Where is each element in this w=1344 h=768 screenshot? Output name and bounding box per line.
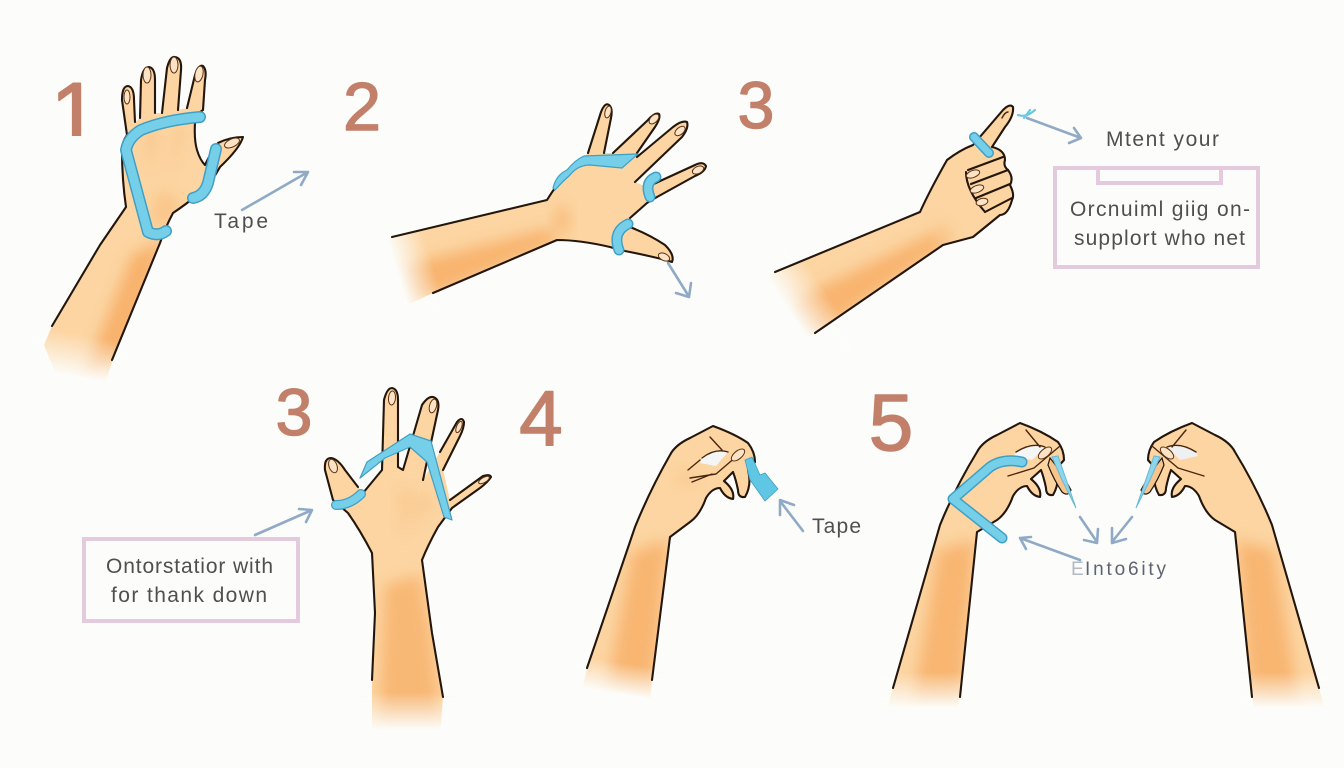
label: Mtent your: Mtent your <box>1106 128 1219 151</box>
callout box bottom left: Ontorstatior with <box>106 555 273 578</box>
callout box top right: supplort who net <box>1074 227 1245 250</box>
hand 1 with tape <box>30 57 243 390</box>
callout box bottom left <box>84 539 298 621</box>
arrow: to wrist tape <box>1020 537 1080 560</box>
arrow: hand 4 <box>255 509 312 535</box>
label: Tape 2: Tape <box>812 515 861 538</box>
step number 3 bottom: 3 <box>276 375 312 449</box>
callout box top right <box>1055 168 1258 267</box>
hand 4 open with tape <box>325 388 491 745</box>
hand 5 pinching tape <box>572 426 778 710</box>
arrow: hand 5 <box>780 500 803 531</box>
hand 2 with tape rings <box>378 104 706 315</box>
label: Tape 1: Tape <box>214 210 268 233</box>
right hand <box>1136 423 1332 725</box>
tape end: hand 3 <box>1018 110 1035 118</box>
arrow: hand 1 <box>242 172 308 210</box>
callout box bottom left: for thank down <box>111 584 267 607</box>
arrow: to left fingers <box>1080 517 1098 543</box>
arrow: hand 2 <box>668 263 691 297</box>
arrow: hand 3 <box>1027 118 1081 143</box>
step number 4: 4 <box>519 374 563 462</box>
step number 3 top: 3 <box>738 68 774 142</box>
label: Eintoбity: Into6ity <box>1085 559 1166 580</box>
step number 2: 2 <box>343 69 381 145</box>
label: Eintoбity: E <box>1071 559 1084 580</box>
step number 1: 1 <box>51 64 99 163</box>
hand 3 pointing <box>770 104 1014 336</box>
left hand with wrist tape <box>880 423 1076 725</box>
step number 5: 5 <box>869 378 913 467</box>
arrow: to right fingers <box>1112 517 1132 543</box>
callout box top right: Orcnuiml giig on- <box>1070 198 1250 221</box>
